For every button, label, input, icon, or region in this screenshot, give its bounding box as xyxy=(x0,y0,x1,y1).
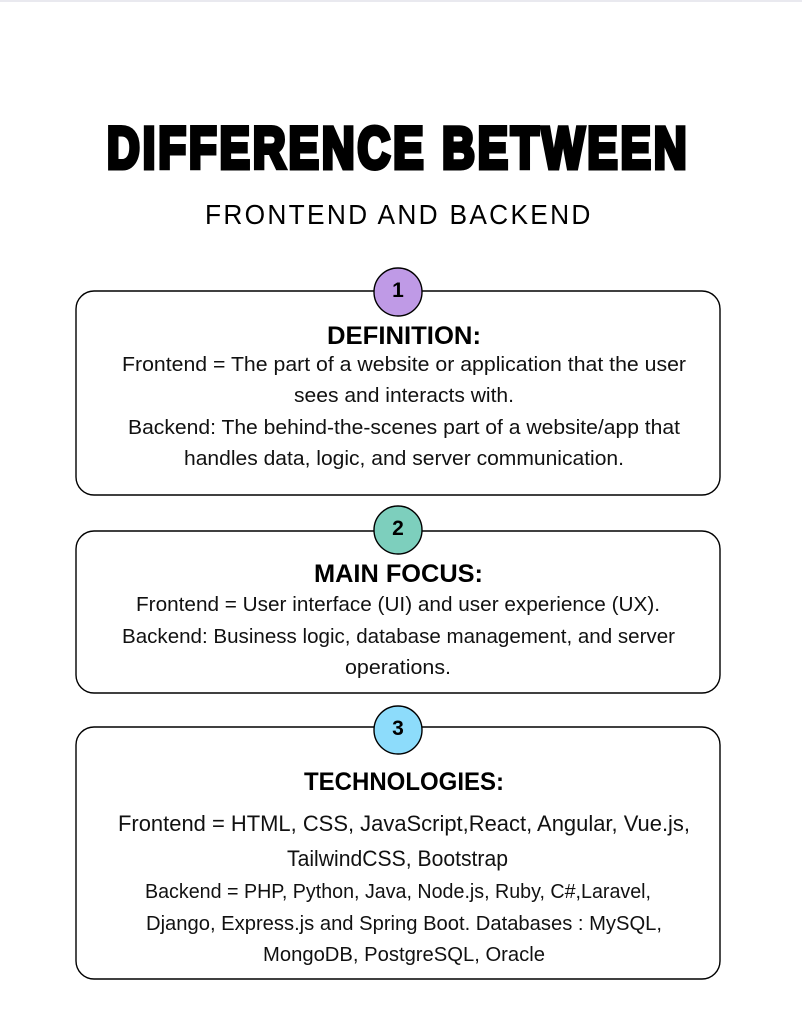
frontend technologies text: TailwindCSS, Bootstrap xyxy=(287,846,508,871)
panel: technologies xyxy=(76,706,720,979)
body text xyxy=(122,354,686,470)
title: DIFFERENCE BETWEEN xyxy=(107,117,687,181)
number badge 2: 2 xyxy=(392,517,404,540)
backend technologies text: Backend = PHP, Python, Java, Node.js, Ruby, C#,Laravel, xyxy=(145,881,651,903)
heading: MAIN FOCUS: xyxy=(314,560,483,588)
backend technologies text: MongoDB, PostgreSQL, Oracle xyxy=(263,944,545,966)
body text: Backend: The behind-the-scenes part of a website/app that xyxy=(128,417,680,439)
body text: Frontend = User interface (UI) and user experience (UX). xyxy=(136,594,660,616)
backend technologies text: Django, Express.js and Spring Boot. Databases : MySQL, xyxy=(146,913,662,935)
frontend technologies text: Frontend = HTML, CSS, JavaScript,React, Angular, Vue.js, xyxy=(118,811,690,836)
panel: definition xyxy=(76,268,720,495)
heading: TECHNOLOGIES: xyxy=(304,768,504,796)
number badge 3: 3 xyxy=(392,717,404,740)
panel box xyxy=(76,727,720,979)
body text: sees and interacts with. xyxy=(294,385,514,407)
number badge 2 xyxy=(374,506,422,554)
panel: main focus xyxy=(76,506,720,693)
frontend technologies text xyxy=(118,811,690,871)
body text: Backend: Business logic, database management, and server xyxy=(122,626,675,648)
panel box xyxy=(76,291,720,495)
number badge 3 xyxy=(374,706,422,754)
number badge 1: 1 xyxy=(392,279,404,302)
body text: Frontend = The part of a website or application that the user xyxy=(122,354,686,376)
number badge 1 xyxy=(374,268,422,316)
body text xyxy=(122,594,675,679)
subtitle: FRONTEND AND BACKEND xyxy=(205,198,590,230)
panel box xyxy=(76,531,720,693)
heading: DEFINITION: xyxy=(327,322,481,350)
body text: operations. xyxy=(345,657,451,679)
backend technologies text xyxy=(145,881,662,966)
body text: handles data, logic, and server communication. xyxy=(184,448,624,470)
